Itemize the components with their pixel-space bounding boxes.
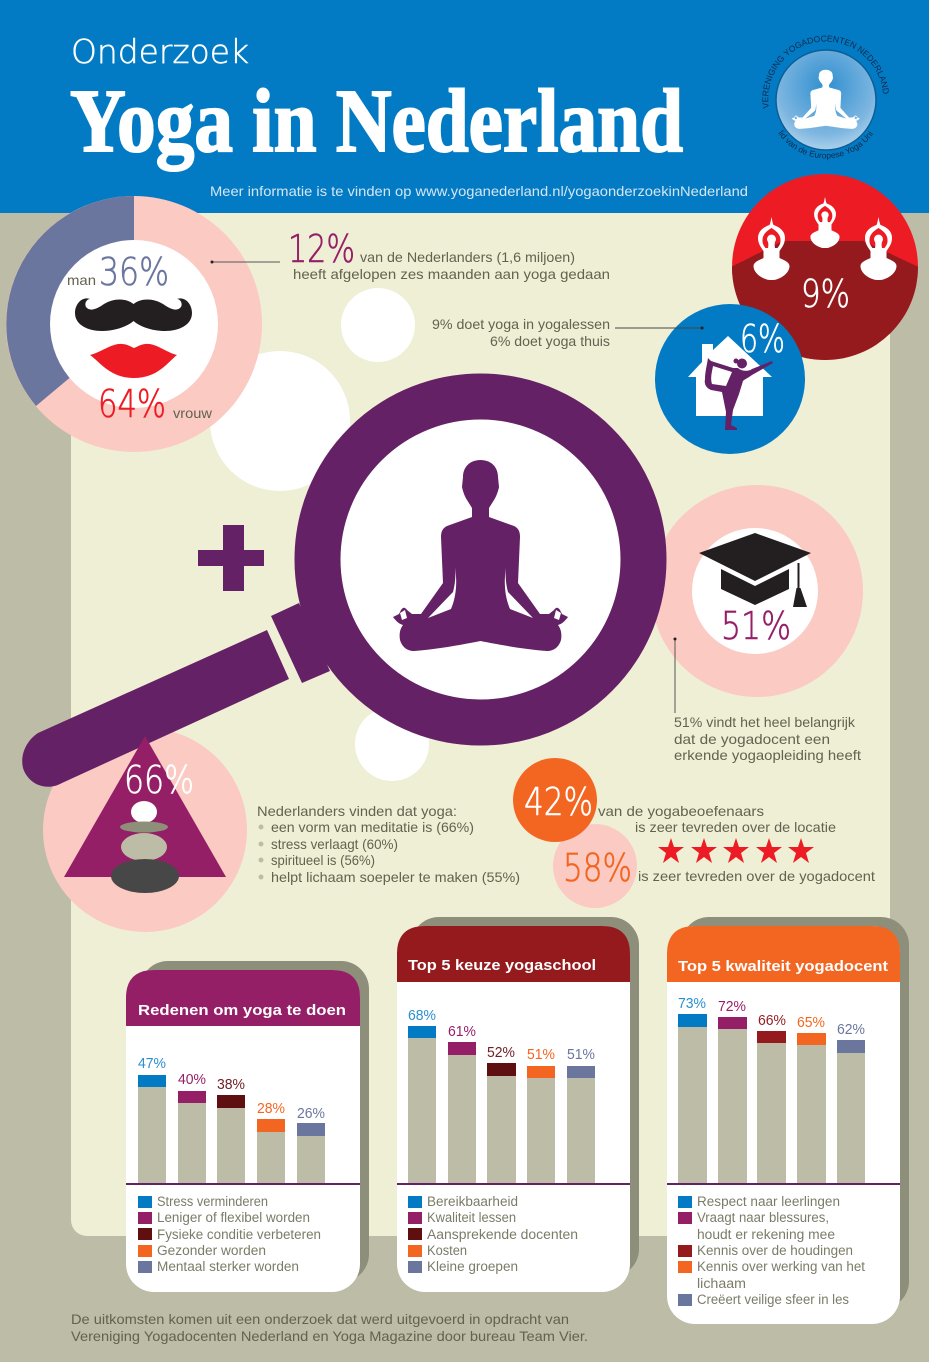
icon: lips [90,344,177,378]
icon: mustache [75,298,192,331]
callout: 12 percent [210,227,610,282]
bar chart: 61% [448,1024,476,1040]
legend: Mentaal sterker worden [157,1259,299,1274]
ring [318,396,644,722]
legend: Creëert veilige sfeer in les [697,1292,849,1307]
logo: VERENIGING YOGADOCENTEN NEDERLAND [762,36,889,109]
legend: Respect naar leerlingen [697,1194,840,1209]
header link: Meer informatie is te vinden op www.yoganederland.nl/yogaonderzoekinNederland [210,183,748,199]
bar chart: 51% [527,1047,555,1063]
callout: 12 percent: 12% [288,227,355,271]
man label: man [67,272,96,288]
legend: Leniger of flexibel worden [157,1210,310,1225]
icon: dancer [705,358,773,430]
magnifying glass [22,396,644,787]
card: redenen om yoga te doen [126,961,369,1292]
list: what yoga means: spiritueel is (56%) [271,852,375,868]
list: what yoga means: een vorm van meditatie is (66%) [271,819,474,835]
footer note [71,1311,588,1344]
red circle: 9 percent in classes: 9% [801,272,850,316]
card: top 5 kwaliteit yogadocent [667,917,909,1324]
pink circle: education [651,485,863,697]
card heading: Top 5 kwaliteit yogadocent [678,958,888,975]
bar chart: 62% [837,1022,865,1038]
bar chart: 52% [487,1045,515,1061]
satisfaction stats: 42% [524,780,593,824]
logo [762,36,889,160]
satisfaction stats: is zeer tevreden over de yogadocent [638,868,875,884]
satisfaction stats: 58% [563,846,632,890]
blue circle: 6 percent at home: 6% [740,317,785,361]
legend: Kennis over de houdingen [697,1243,853,1258]
callout: classes vs home: 6% doet yoga thuis [490,333,610,349]
cream panel [71,200,890,1236]
callout: classes vs home [432,316,704,349]
satisfaction stats: is zeer tevreden over de locatie [635,819,836,835]
collar [271,603,330,683]
header band [0,0,929,213]
list: what yoga means: stress verlaagt (60%) [271,836,398,852]
legend: Kennis over werking van het [697,1259,865,1274]
callout: education text: 51% vindt het heel belangrijk [674,714,856,730]
bar chart [397,1008,630,1185]
card heading: Top 5 keuze yogaschool [408,957,596,974]
icon: five stars [658,838,814,863]
legend: Stress verminderen [157,1194,268,1209]
bar chart: 26% [297,1106,325,1122]
legend [408,1194,578,1274]
card heading: Redenen om yoga te doen [138,1002,346,1019]
legend: Vraagt naar blessures, [697,1210,829,1225]
blue circle: 6 percent at home [655,304,805,454]
bar chart: 28% [257,1101,285,1117]
triangle with stones: 66% [124,758,194,802]
legend [678,1194,865,1307]
legend [138,1194,321,1274]
list: what yoga means [257,803,520,885]
bar chart: 72% [718,999,746,1015]
legend: houdt er rekening mee [697,1227,835,1242]
callout: education text: erkende yogaopleiding heeft [674,747,861,763]
legend: Aansprekende docenten [427,1227,578,1242]
legend: Gezonder worden [157,1243,266,1258]
icon: house [688,336,772,416]
list: what yoga means: Nederlanders vinden dat yoga: [257,803,457,819]
footer note: De uitkomsten komen uit een onderzoek dat werd uitgevoerd in opdracht van [71,1311,569,1327]
header title small: Onderzoek [71,32,249,71]
callout: education text: dat de yogadocent een [674,731,830,747]
satisfaction stats [513,758,875,908]
red circle: 9 percent in classes [725,174,925,365]
bar chart: 51% [567,1047,595,1063]
main title: Yoga in Nederland [70,72,683,171]
list: what yoga means: helpt lichaam soepeler te maken (55%) [271,869,520,885]
bar chart: 47% [138,1056,166,1072]
bar chart [667,996,900,1185]
legend: Kwaliteit lessen [427,1210,516,1225]
plus sign [198,525,264,591]
legend: Kleine groepen [427,1259,518,1274]
bar chart [126,1056,360,1185]
card: top 5 keuze yogaschool [397,917,639,1292]
triangle with stones [64,736,226,893]
legend: Fysieke conditie verbeteren [157,1227,321,1242]
icon: graduation cap [699,533,811,607]
bar chart: 73% [678,996,706,1012]
bar chart: 38% [217,1077,245,1093]
legend: lichaam [697,1276,746,1291]
legend: Kosten [427,1243,467,1258]
bar chart: 65% [797,1015,825,1031]
decorative white bubbles [210,288,429,781]
bar chart: 66% [758,1013,786,1029]
callout: 12 percent: van de Nederlanders (1,6 miljoen) [360,249,575,265]
handle [22,630,289,787]
64 percent: 64% [98,382,166,426]
legend: Bereikbaarheid [427,1194,518,1209]
icon: meditating figure [393,460,568,651]
callout: education text [674,638,861,763]
bar chart: 68% [408,1008,436,1024]
satisfaction stats: van de yogabeoefenaars [598,803,764,819]
callout: 12 percent: heeft afgelopen zes maanden aan yoga gedaan [293,266,610,282]
donut: gender split [6,196,262,452]
bar chart: 40% [178,1072,206,1088]
pink circle: education: 51% [721,604,791,648]
36 percent: 36% [99,250,169,294]
vrouw label: vrouw [173,405,213,421]
pink circle backdrop: stones [43,728,247,932]
footer note: Vereniging Yogadocenten Nederland en Yoga Magazine door bureau Team Vier. [71,1328,588,1344]
callout: classes vs home: 9% doet yoga in yogalessen [432,316,610,332]
